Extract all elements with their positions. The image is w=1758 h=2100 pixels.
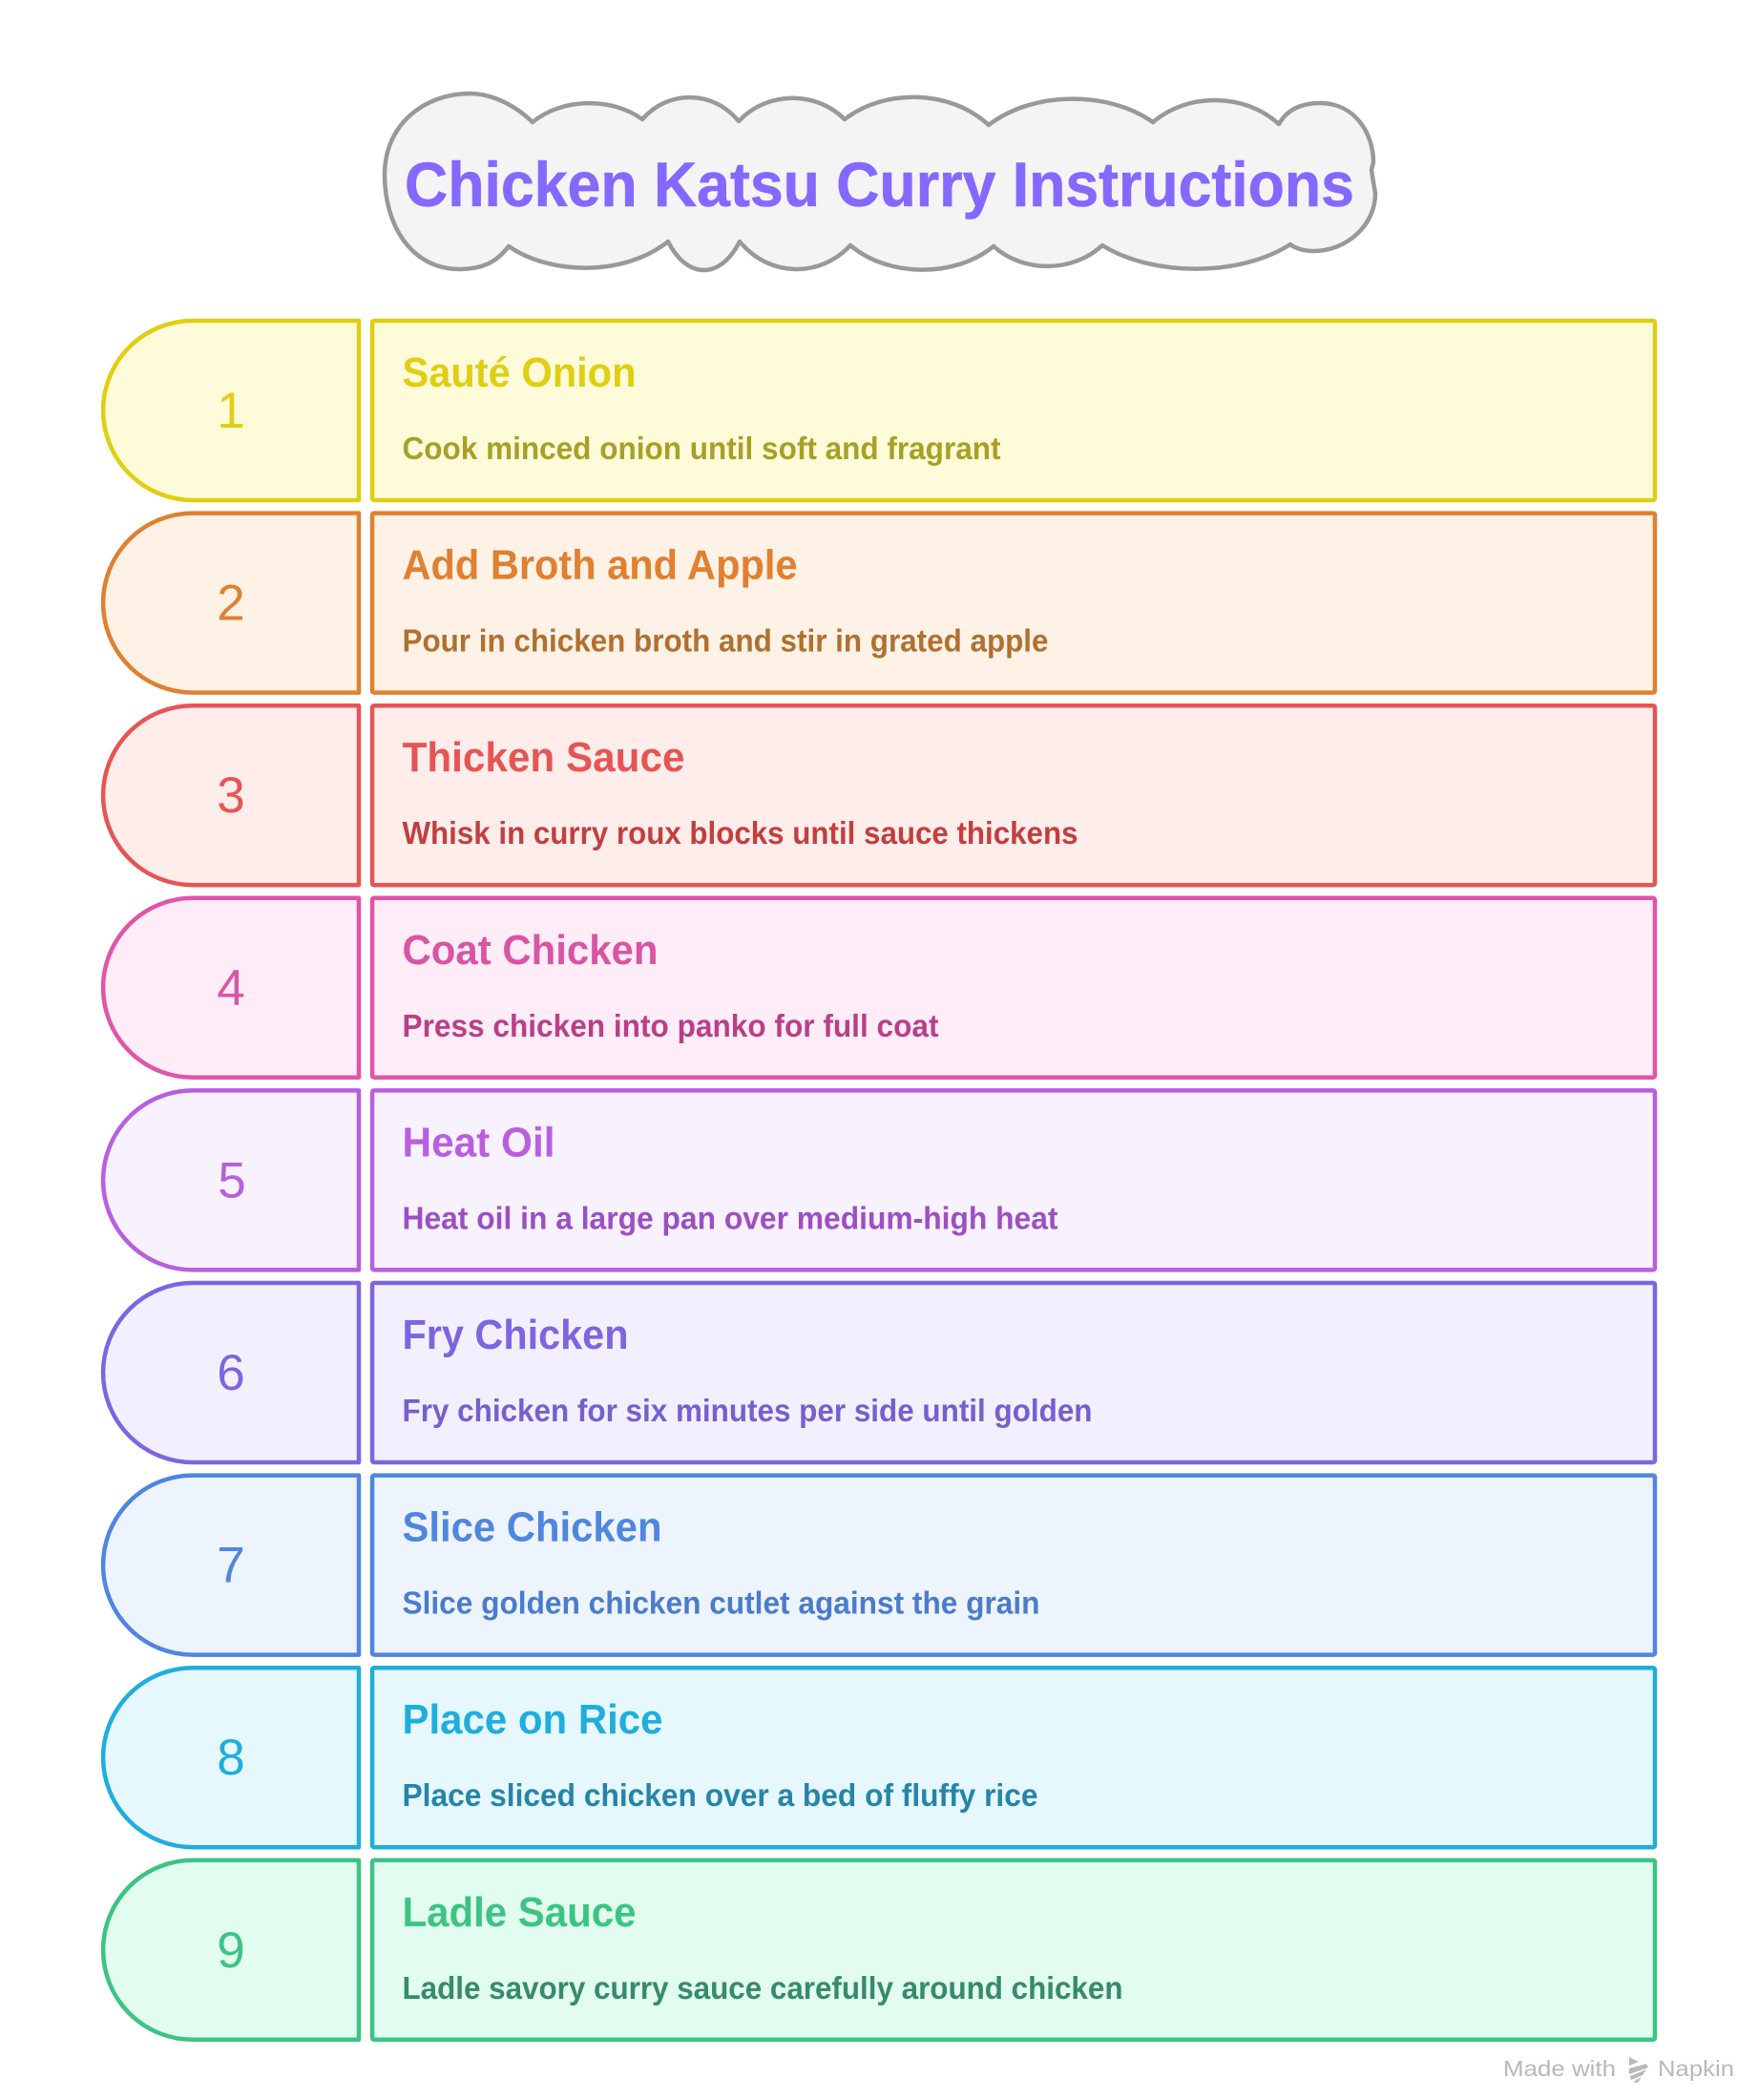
content box 8 xyxy=(372,1668,1655,1847)
heading 1: Sauté Onion xyxy=(403,349,636,396)
number 9: 9 xyxy=(217,1922,245,1979)
number tab 8 xyxy=(103,1668,359,1847)
heading 2: Add Broth and Apple xyxy=(403,542,798,589)
icon: napkin logo xyxy=(1629,2057,1648,2083)
content box 9 xyxy=(372,1860,1655,2040)
number tab 3 xyxy=(103,705,359,885)
number tab 7 xyxy=(103,1476,359,1655)
number 3: 3 xyxy=(217,767,245,824)
heading 9: Ladle Sauce xyxy=(403,1889,636,1936)
cloud shape xyxy=(385,94,1375,270)
step 5 xyxy=(103,1090,1655,1270)
number tab 5 xyxy=(103,1090,359,1270)
description 6: Fry chicken for six minutes per side until golden xyxy=(403,1393,1092,1428)
number tab 9 xyxy=(103,1860,359,2040)
description 5: Heat oil in a large pan over medium-high heat xyxy=(403,1200,1058,1235)
content box 1 xyxy=(372,321,1655,500)
content box 4 xyxy=(372,898,1655,1078)
number tab 2 xyxy=(103,514,359,693)
step 8 xyxy=(103,1668,1655,1847)
number 4: 4 xyxy=(217,960,245,1017)
step 9 xyxy=(103,1860,1655,2040)
number 2: 2 xyxy=(217,576,245,632)
heading 7: Slice Chicken xyxy=(403,1504,662,1551)
number tab 4 xyxy=(103,898,359,1078)
content box 3 xyxy=(372,705,1655,885)
title: Chicken Katsu Curry Instructions xyxy=(405,149,1354,220)
description 2: Pour in chicken broth and stir in grated apple xyxy=(403,623,1048,659)
number 7: 7 xyxy=(217,1538,245,1594)
description 9: Ladle savory curry sauce carefully around chicken xyxy=(403,1970,1122,2006)
step 3 xyxy=(103,705,1655,885)
content box 7 xyxy=(372,1476,1655,1655)
step 6 xyxy=(103,1283,1655,1462)
number tab 1 xyxy=(103,321,359,500)
step 4 xyxy=(103,898,1655,1078)
heading 6: Fry Chicken xyxy=(403,1312,628,1358)
number 1: 1 xyxy=(217,383,245,439)
heading 5: Heat Oil xyxy=(403,1119,555,1166)
description 8: Place sliced chicken over a bed of fluffy rice xyxy=(403,1777,1038,1813)
description 4: Press chicken into panko for full coat xyxy=(403,1008,939,1043)
watermark: made with napkin xyxy=(1503,2056,1734,2083)
content box 5 xyxy=(372,1090,1655,1270)
step 2 xyxy=(103,514,1655,693)
number tab 6 xyxy=(103,1283,359,1462)
number 8: 8 xyxy=(217,1730,245,1786)
watermark text left: Made with xyxy=(1503,2056,1616,2081)
watermark text right: Napkin xyxy=(1658,2056,1734,2081)
description 3: Whisk in curry roux blocks until sauce thickens xyxy=(403,815,1078,850)
heading 4: Coat Chicken xyxy=(403,927,659,974)
number 6: 6 xyxy=(217,1345,245,1401)
number 5: 5 xyxy=(218,1152,246,1208)
heading 8: Place on Rice xyxy=(403,1696,662,1743)
description 1: Cook minced onion until soft and fragrant xyxy=(403,430,1001,466)
heading 3: Thicken Sauce xyxy=(403,734,685,781)
title cloud xyxy=(385,94,1375,270)
description 7: Slice golden chicken cutlet against the grain xyxy=(403,1586,1040,1621)
content box 6 xyxy=(372,1283,1655,1462)
step 7 xyxy=(103,1476,1655,1655)
step 1 xyxy=(103,321,1655,500)
content box 2 xyxy=(372,514,1655,693)
